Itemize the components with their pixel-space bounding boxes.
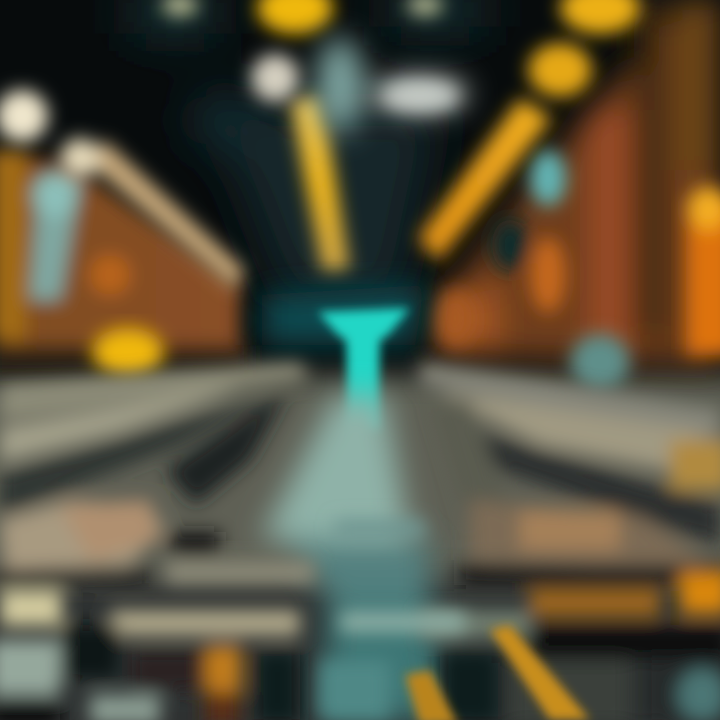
- arrow: central yellow beam: [257, 0, 350, 272]
- icon: yellow blob on left: [92, 328, 164, 376]
- background: grey floor: [0, 375, 720, 720]
- icon: glowing cyan T-shape: [318, 308, 410, 430]
- panel: teal base band: [262, 285, 425, 345]
- panel: right middle details: [435, 150, 630, 390]
- arrow: right diagonal yellow beam: [418, 0, 640, 262]
- floor: left planks: [0, 362, 315, 720]
- panel: left diagonal cream beam: [0, 90, 245, 290]
- background: dark upper wall: [130, 0, 485, 300]
- panel: right orange structure: [430, 0, 720, 365]
- panel: right bright orange column: [686, 186, 720, 355]
- floor: lower yellow stripes: [405, 625, 590, 720]
- panel: left orange structure: [0, 150, 250, 375]
- floor: right planks: [420, 362, 720, 720]
- icon: top pale highlights: [162, 0, 458, 109]
- floor: centre pale bands: [320, 520, 465, 720]
- icon: white and pale-teal cloud at top: [316, 37, 468, 133]
- floor: centre light stream: [260, 395, 450, 720]
